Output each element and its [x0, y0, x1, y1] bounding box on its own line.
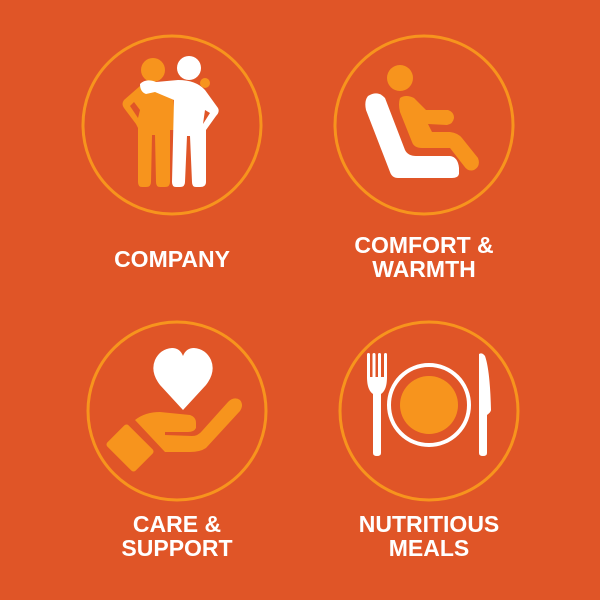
circle: care: [88, 322, 266, 500]
circle: company: [83, 36, 261, 214]
panel: comfort & warmth: WARMTH: [372, 256, 476, 282]
label: nutritious meals: NUTRITIOUS: [359, 511, 499, 537]
panel: comfort & warmth: [335, 36, 513, 282]
icon: plate: [389, 365, 469, 445]
panel: care & support: SUPPORT: [121, 535, 233, 561]
icon: fork: [367, 353, 387, 456]
label: company: COMPANY: [114, 246, 230, 272]
label: care & support: CARE &: [133, 511, 221, 537]
circle: comfort: [335, 36, 513, 214]
icon: heart: [153, 348, 213, 410]
icon: two people: [122, 56, 219, 187]
label: comfort & warmth: COMFORT &: [354, 232, 494, 258]
panel: care & support: [88, 322, 266, 561]
icon: knife: [479, 353, 491, 456]
icon: person in seat: [365, 65, 479, 178]
circle: meals: [340, 322, 518, 500]
icon: hand: [105, 398, 242, 473]
panel: nutritious meals: [340, 322, 518, 561]
panel: nutritious meals: MEALS: [389, 535, 469, 561]
panel: company: [83, 36, 261, 272]
